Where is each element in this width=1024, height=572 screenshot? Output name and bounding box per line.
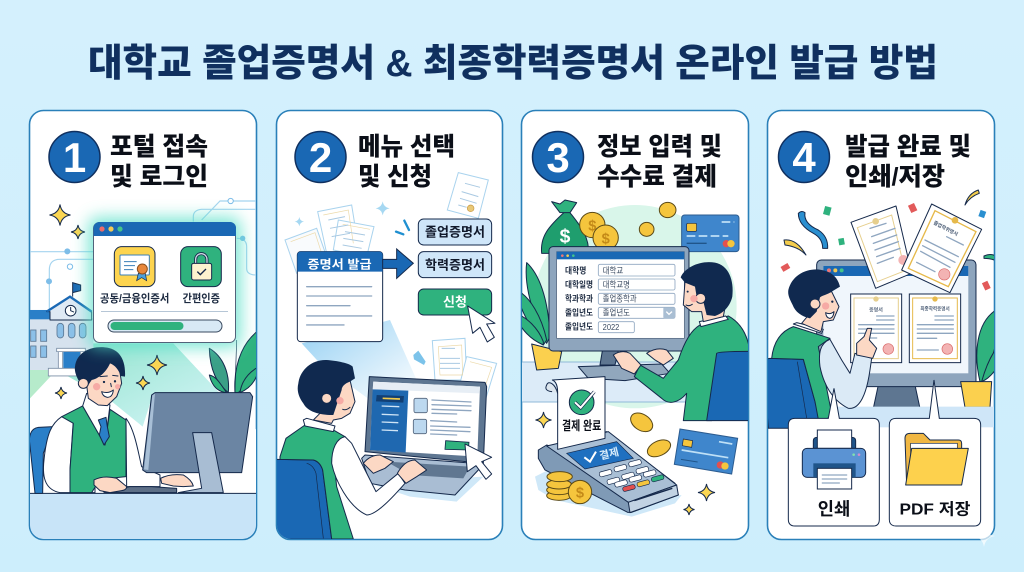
step 4 badge: 4 <box>792 134 816 181</box>
step 2 heading: 및 신청 <box>358 163 432 191</box>
step 2 badge: 2 <box>309 134 332 181</box>
form monitor: 2022 <box>603 322 620 332</box>
print and pdf callouts <box>788 380 981 526</box>
step 2 heading: 메뉴 선택 <box>358 133 455 161</box>
credit card <box>674 429 738 474</box>
on-screen certificate A: 증명서 <box>869 306 883 313</box>
icon: plant <box>208 332 256 392</box>
light beam <box>302 320 426 400</box>
certificate labels: 공동/금융인증서 <box>100 292 169 305</box>
panel: step 2 menu selection <box>270 110 502 540</box>
person at laptop <box>270 338 497 539</box>
on-screen certificate B: 최종학력증명서 <box>920 306 950 313</box>
icon: money bag and coins: $ <box>602 231 610 247</box>
option buttons: 졸업증명서 <box>425 225 485 240</box>
step 1 heading: 포털 접속 <box>110 133 208 161</box>
on-screen certificate A <box>851 294 902 363</box>
receipt <box>546 377 605 449</box>
form monitor: 대학교 <box>603 265 624 275</box>
form monitor: 졸업종학과 <box>603 294 637 304</box>
sparkles <box>536 412 715 515</box>
icon: school building <box>30 283 93 376</box>
step 2 badge <box>295 132 346 182</box>
icon: padlock <box>181 247 221 287</box>
receipt: 결제 완료 <box>562 418 601 433</box>
step 1 badge <box>49 132 100 182</box>
callout: pdf save: PDF 저장 <box>899 500 971 518</box>
coins: $ <box>576 486 584 502</box>
icon: money bag and coins: $ <box>560 227 571 248</box>
certificate labels: 간편인증 <box>183 292 220 305</box>
monitor with certificates <box>817 260 976 413</box>
confetti <box>781 190 1001 291</box>
certificate form: 증명서 발급 <box>307 257 372 271</box>
login window <box>88 217 241 348</box>
floating certificates <box>285 173 488 273</box>
sparkles <box>50 204 167 399</box>
panel: step 4 issuance and print <box>763 110 1003 540</box>
step 3 heading: 정보 입력 및 <box>597 133 722 161</box>
form monitor: 졸입년도 <box>565 321 593 332</box>
icon: mouse cursor <box>468 306 495 342</box>
form monitor <box>549 247 689 351</box>
floating certificates: 졸업학위명서 <box>932 219 959 238</box>
step 1 heading: 및 로그인 <box>110 163 208 191</box>
icon: credit card <box>682 215 739 252</box>
step 4 heading <box>845 133 971 191</box>
panel: step 3 info and payment <box>515 110 752 540</box>
step 3 heading <box>597 133 722 191</box>
person pointing <box>763 269 1000 428</box>
form monitor: 대학교명 <box>603 280 630 290</box>
callout: print <box>788 388 879 526</box>
progress bar <box>108 320 222 332</box>
form monitor: 대학일명 <box>565 278 593 289</box>
option buttons <box>418 219 492 315</box>
form monitor: 대학명 <box>565 264 586 275</box>
callout: pdf save <box>889 380 981 526</box>
desk scene <box>515 200 752 421</box>
step 4 badge <box>778 132 830 182</box>
step 1 heading <box>110 133 208 191</box>
option buttons: 학력증명서 <box>425 257 485 272</box>
step 2 heading <box>358 133 455 191</box>
person typing <box>613 262 752 421</box>
watermark sparkle <box>973 525 995 547</box>
icon: plant <box>522 262 562 370</box>
scene: login illustration <box>29 198 267 542</box>
panel: step 1 portal login <box>29 110 267 542</box>
step 4 heading: 인쇄/저장 <box>845 163 945 191</box>
certificate labels <box>100 292 220 305</box>
option buttons: 신청 <box>443 295 467 310</box>
arrow to options <box>383 249 413 278</box>
payment terminal <box>535 377 738 517</box>
callout: print: 인쇄 <box>818 499 850 519</box>
floating certificates <box>851 204 982 293</box>
certificate form <box>297 252 383 342</box>
step 4 heading: 발급 완료 및 <box>845 133 971 161</box>
form monitor: 졸입년도 <box>565 307 593 318</box>
on-screen certificate B <box>909 294 961 363</box>
step 1 badge: 1 <box>63 134 86 181</box>
form monitor: 졸업년도 <box>603 308 630 318</box>
payment terminal: 결제 <box>598 445 620 463</box>
person at desktop <box>29 347 257 542</box>
coins <box>547 409 673 504</box>
icon: plant <box>960 310 994 407</box>
step 3 heading: 수수료 결제 <box>597 163 717 191</box>
icon: money bag and coins <box>541 200 676 253</box>
title: 대학교 졸업증명서 & 최종학력증명서 온라인 발급 방법 <box>88 43 938 85</box>
step 3 badge <box>532 132 584 182</box>
icon: money bag and coins: $ <box>588 219 596 235</box>
icon: certificate <box>114 247 155 287</box>
step 3 badge: 3 <box>546 134 570 181</box>
form monitor: 학과학과 <box>565 292 593 303</box>
